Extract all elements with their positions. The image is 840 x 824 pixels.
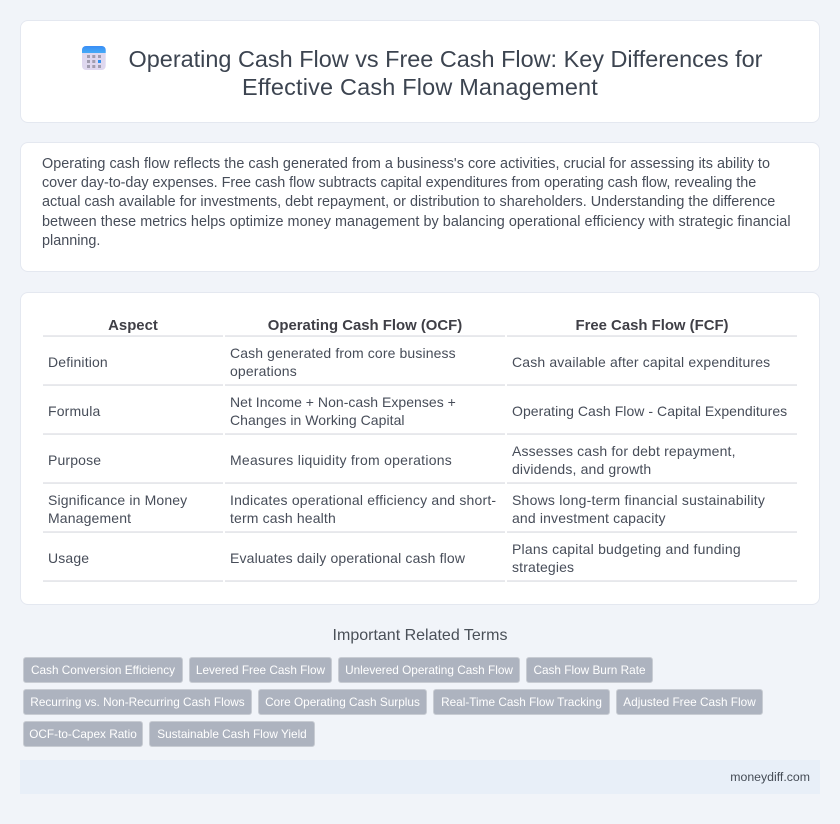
footer bar bbox=[20, 760, 820, 794]
table header bbox=[108, 318, 729, 334]
row: Formula: Formula bbox=[48, 403, 100, 419]
row: Significance in Money Management: Shows long-term financial sustainability bbox=[512, 492, 765, 508]
row: Purpose: Assesses cash for debt repayment, bbox=[512, 443, 736, 459]
title: Operating Cash Flow vs Free Cash Flow: Key Differences for bbox=[129, 46, 762, 72]
table header: Operating Cash Flow (OCF) bbox=[268, 318, 462, 334]
tags: Core Operating Cash Surplus bbox=[265, 695, 420, 709]
tags: Levered Free Cash Flow bbox=[196, 663, 325, 677]
row: Significance in Money Management bbox=[48, 492, 765, 526]
intro panel bbox=[20, 142, 820, 272]
comparison table panel bbox=[20, 292, 820, 605]
intro text: planning. bbox=[42, 233, 100, 249]
table header: Aspect bbox=[108, 318, 158, 334]
icon: calendar bbox=[82, 46, 106, 70]
row: Usage: Plans capital budgeting and funding bbox=[512, 541, 741, 557]
tags: Cash Flow Burn Rate bbox=[533, 663, 646, 677]
intro text: Operating cash flow reflects the cash generated from a business's core activities, crucial for assessing its ability to bbox=[42, 156, 770, 172]
tags: OCF-to-Capex Ratio bbox=[29, 727, 137, 741]
row: Purpose: Measures liquidity from operations bbox=[230, 452, 452, 468]
intro text: cover day-to-day expenses. Free cash flow subtracts capital expenditures from operating cash flow, revealing the bbox=[42, 175, 756, 191]
row: Formula: Net Income + Non-cash Expenses + bbox=[230, 394, 456, 410]
row: Usage: strategies bbox=[512, 559, 574, 575]
row: Formula bbox=[48, 394, 787, 428]
tags: Sustainable Cash Flow Yield bbox=[157, 727, 307, 741]
row: Significance in Money Management: term cash health bbox=[230, 510, 336, 526]
footer brand: moneydiff.com bbox=[730, 770, 810, 784]
intro text: actual cash available for investments, debt repayment, or distribution to shareholders. Understanding the difference bbox=[42, 194, 775, 210]
table header: Free Cash Flow (FCF) bbox=[575, 318, 729, 334]
row: Formula: Operating Cash Flow - Capital Expenditures bbox=[512, 403, 787, 419]
tags: Adjusted Free Cash Flow bbox=[623, 695, 756, 709]
row: Significance in Money Management: Indicates operational efficiency and short- bbox=[230, 492, 496, 508]
header card bbox=[20, 20, 820, 123]
row: Usage: Evaluates daily operational cash flow bbox=[230, 550, 465, 566]
row: Definition: Cash generated from core business bbox=[230, 345, 456, 361]
tags bbox=[23, 657, 763, 747]
row: Purpose: dividends, and growth bbox=[512, 461, 651, 477]
row: Usage bbox=[48, 541, 741, 575]
row: Usage: Usage bbox=[48, 550, 89, 566]
row: Definition: operations bbox=[230, 363, 297, 379]
related terms heading: Important Related Terms bbox=[333, 627, 507, 644]
tags: Unlevered Operating Cash Flow bbox=[345, 663, 513, 677]
tags: Real-Time Cash Flow Tracking bbox=[441, 695, 602, 709]
row dividers bbox=[43, 335, 797, 582]
row: Significance in Money Management: Significance in Money bbox=[48, 492, 187, 508]
row: Definition: Definition bbox=[48, 354, 108, 370]
row: Formula: Changes in Working Capital bbox=[230, 412, 405, 428]
row: Significance in Money Management: and investment capacity bbox=[512, 510, 666, 526]
row: Definition bbox=[48, 345, 770, 379]
intro text: between these metrics helps optimize money management by balancing operational efficiency with strategic financial bbox=[42, 214, 791, 230]
intro text bbox=[42, 156, 791, 249]
title bbox=[129, 46, 762, 100]
title: Effective Cash Flow Management bbox=[242, 74, 598, 100]
row: Significance in Money Management: Management bbox=[48, 510, 131, 526]
tags: Recurring vs. Non-Recurring Cash Flows bbox=[30, 695, 245, 709]
row: Purpose: Purpose bbox=[48, 452, 101, 468]
row: Definition: Cash available after capital expenditures bbox=[512, 354, 770, 370]
tags: Cash Conversion Efficiency bbox=[31, 663, 175, 677]
row: Purpose bbox=[48, 443, 736, 477]
